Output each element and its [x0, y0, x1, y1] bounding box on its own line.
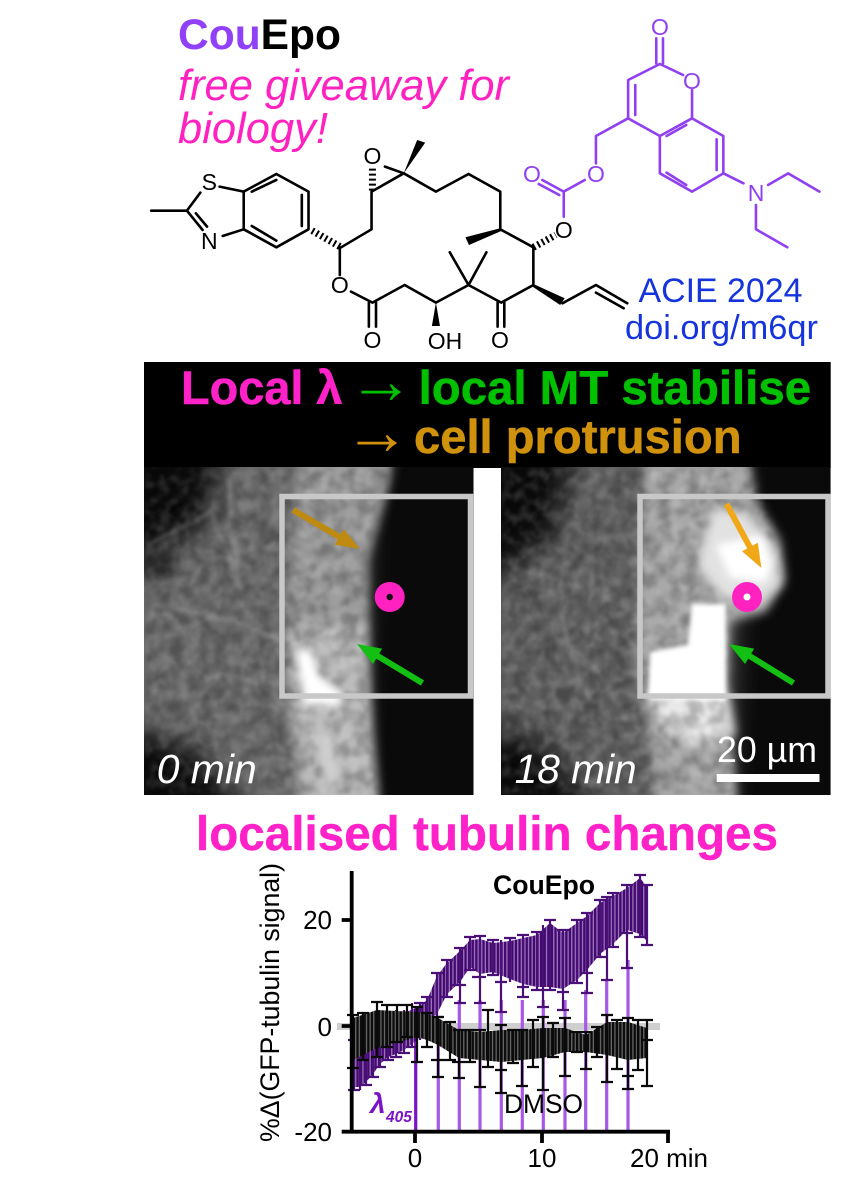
header band: local light causes MT stabilisation and protrusion [144, 343, 831, 468]
illumination spot: left panel [375, 582, 405, 612]
scale bar: 20 µm: 20 µm [717, 729, 817, 770]
subtitle: free giveaway for biology: free giveaway for [178, 62, 511, 110]
axes [342, 871, 670, 1143]
atom labels: O [363, 327, 381, 353]
y tick labels: 0 [318, 1012, 332, 1042]
header band: local light causes MT stabilisation and protrusion: → [344, 394, 410, 468]
atom labels: N [748, 180, 764, 206]
arrow: orange, right panel [726, 504, 761, 568]
x tick labels: 10 [528, 1143, 556, 1173]
time label: 0 min: 0 min [157, 746, 257, 792]
y axis title: %Δ(GFP-tubulin signal) [255, 863, 285, 1142]
light label: lambda 405: 405 [385, 1109, 412, 1126]
series label: DMSO: DMSO [504, 1089, 583, 1119]
region of interest box: right panel [640, 496, 828, 696]
coumarin cage in purple [539, 38, 819, 247]
atom labels: O [363, 143, 381, 169]
subtitle: free giveaway for biology: biology! [178, 105, 328, 153]
x tick labels: 20 min [630, 1143, 708, 1173]
y tick labels [294, 905, 332, 1147]
citation: ACIE 2024 and DOI [625, 272, 818, 347]
atom labels [201, 14, 764, 354]
atom labels: O [523, 161, 541, 187]
illumination spot: right panel [732, 582, 762, 612]
x tick labels [408, 1143, 708, 1173]
header band: local light causes MT stabilisation and protrusion: cell protrusion [414, 410, 742, 463]
zero reference line [337, 1023, 660, 1030]
atom labels: O [555, 217, 573, 243]
chart heading: localised tubulin changes [196, 808, 778, 861]
atom labels: O [683, 68, 701, 94]
citation: ACIE 2024 and DOI: ACIE 2024 [638, 272, 802, 310]
DMSO series [347, 1002, 653, 1093]
micrograph panel: 18 min [501, 467, 831, 795]
atom labels: O [587, 161, 605, 187]
header band: local light causes MT stabilisation and protrusion: Local λ [181, 361, 342, 414]
arrow: orange, left panel [293, 510, 360, 549]
chemical structure: CouEpo molecule [151, 14, 819, 354]
CouEpo series [348, 875, 653, 1090]
arrow: green, right panel [729, 644, 794, 683]
x tick labels: 0 [408, 1143, 422, 1173]
atom labels: O [491, 327, 509, 353]
y tick labels: -20 [294, 1117, 332, 1147]
atom labels: S [202, 169, 217, 195]
y tick labels: 20 [303, 905, 332, 935]
atom labels: N [201, 228, 218, 254]
atom labels: O [651, 14, 669, 40]
micrograph panel: 0 min [144, 467, 474, 795]
region of interest box: left panel [282, 496, 470, 696]
atom labels: O [331, 272, 349, 298]
light label: lambda 405: λ [368, 1088, 386, 1119]
light label: lambda 405 [368, 1088, 412, 1126]
subtitle: free giveaway for biology [178, 62, 511, 153]
header band: local light causes MT stabilisation and protrusion: local MT stabilise [419, 361, 811, 414]
series label: CouEpo: CouEpo [493, 870, 595, 900]
line chart: GFP-tubulin signal over time [255, 863, 708, 1173]
time label: 18 min: 18 min [515, 746, 637, 792]
atom labels: OH [428, 328, 462, 354]
citation: ACIE 2024 and DOI: doi.org/m6qr [625, 309, 818, 347]
title: CouEpo: CouEpo [178, 11, 341, 59]
arrow: green, left panel [357, 644, 422, 683]
header band: local light causes MT stabilisation and protrusion: → [348, 343, 414, 417]
uncaging light pulses [416, 960, 628, 1131]
epothilone scaffold in black [151, 38, 819, 327]
